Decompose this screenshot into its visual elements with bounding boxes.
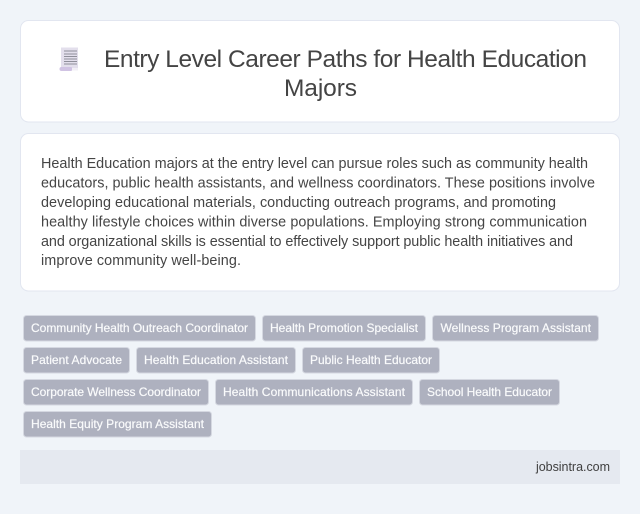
text block: description paragraph: and organizational skills is essential to effectively support public health initiatives and <box>41 234 573 250</box>
tag <box>432 316 598 341</box>
tag: School Health Educator <box>427 385 552 399</box>
text block: description paragraph <box>41 156 595 269</box>
text block: description paragraph: educators, public health assistants, and wellness coordinators. These positions involve <box>41 176 595 192</box>
tag: Health Promotion Specialist <box>270 321 419 335</box>
tag <box>24 412 212 437</box>
footer bar <box>20 450 620 484</box>
title: Majors <box>284 75 357 102</box>
tag: Public Health Educator <box>310 353 432 367</box>
footer source text: jobsintra.com <box>535 460 610 474</box>
tag <box>24 380 208 405</box>
tag <box>302 348 440 373</box>
tag: Wellness Program Assistant <box>440 321 592 335</box>
tag <box>262 316 426 341</box>
text block: description paragraph: Health Education majors at the entry level can pursue roles such as community health <box>41 156 588 172</box>
panel: description <box>20 134 620 291</box>
tag: Community Health Outreach Coordinator <box>31 321 248 335</box>
tag <box>216 380 412 405</box>
tag list <box>24 316 598 437</box>
tag: Corporate Wellness Coordinator <box>31 385 201 399</box>
tag <box>24 348 130 373</box>
tag <box>24 316 256 341</box>
tag <box>420 380 560 405</box>
icon: document scroll <box>60 48 78 71</box>
tag: Patient Advocate <box>31 353 122 367</box>
tag: Health Equity Program Assistant <box>31 417 205 431</box>
title: Entry Level Career Paths for Health Education <box>104 46 587 73</box>
text block: description paragraph: developing educational materials, conducting outreach programs, and promoting <box>41 195 556 211</box>
text block: description paragraph: improve community well-being. <box>41 253 241 269</box>
text block: description paragraph: healthy lifestyle choices within diverse populations. Employing strong communication <box>41 214 587 230</box>
title <box>104 46 587 102</box>
tag <box>136 348 296 373</box>
panel: header card <box>20 20 620 122</box>
tag: Health Education Assistant <box>144 353 289 367</box>
tag: Health Communications Assistant <box>223 385 406 399</box>
